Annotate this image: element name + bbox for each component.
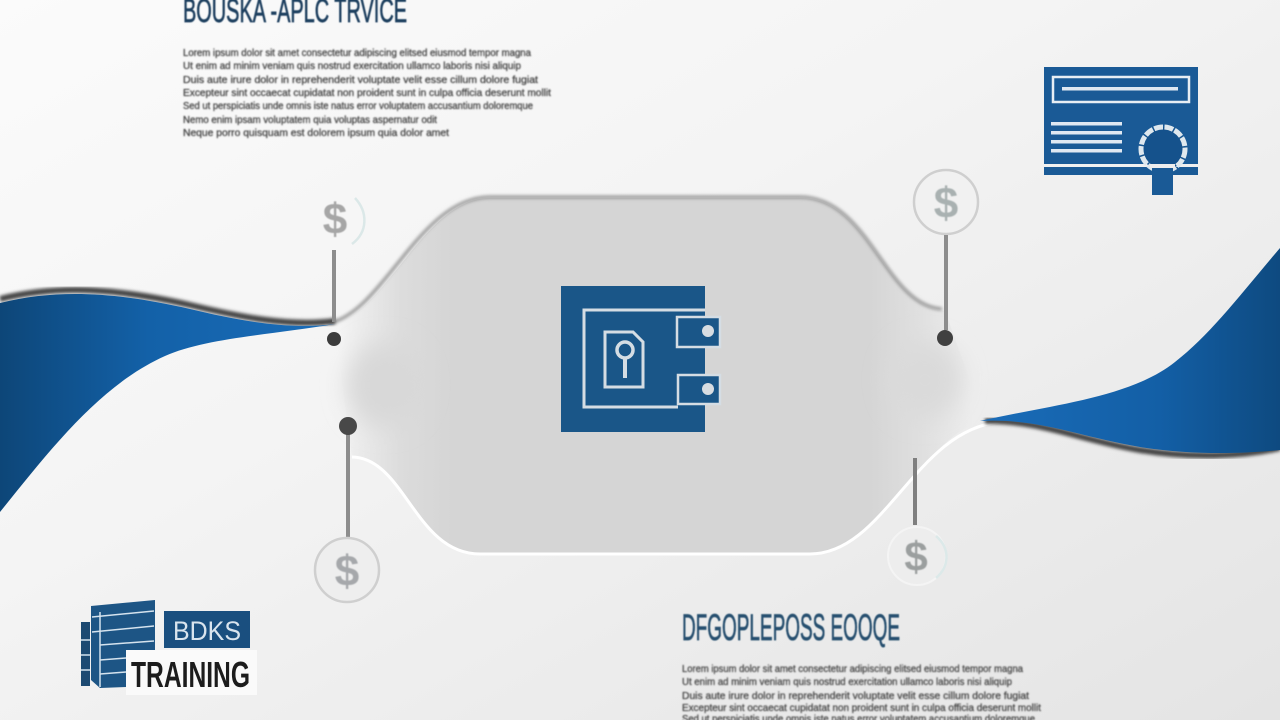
text block: bottom: Excepteur sint occaecat cupidatat non proident sunt in culpa officia deserunt mollit (682, 702, 1041, 714)
right blue wave (980, 248, 1280, 455)
pin: lower left dollar (315, 417, 379, 602)
training label (126, 650, 257, 695)
text block: top: Excepteur sint occaecat cupidatat non proident sunt in culpa officia deserunt mollit (183, 87, 551, 99)
text block: bottom: Lorem ipsum dolor sit amet consectetur adipiscing elitsed eiusmod tempor magna (682, 663, 1023, 675)
text block: top (183, 47, 551, 139)
pin: lower right dollar: $ (904, 533, 928, 580)
pin: lower right dollar (888, 458, 946, 585)
pin: lower left dollar: $ (335, 547, 359, 596)
text block: bottom: Ut enim ad minim veniam quis nostrud exercitation ullamco laboris nisi aliquip (682, 676, 1012, 688)
text block: top: Ut enim ad minim veniam quis nostrud exercitation ullamco laboris nisi aliquip (183, 60, 521, 72)
icon: certificate (1044, 67, 1198, 195)
bottom edge highlight (352, 422, 1000, 554)
icon: central safe (561, 286, 720, 432)
logo: books training: BDKS (173, 616, 241, 646)
text block: bottom: Duis aute irure dolor in reprehenderit voluptate velit esse cillum dolore fugiat (682, 690, 1029, 702)
text block: top: Neque porro quisquam est dolorem ipsum quia dolor amet (183, 127, 449, 139)
pin: upper left dollar (323, 195, 364, 346)
icon: books (81, 600, 155, 688)
text block: top: Nemo enim ipsam voluptatem quia voluptas aspernatur odit (183, 114, 437, 126)
top edge shadow (330, 197, 942, 323)
logo: books training: TRAINING (131, 654, 250, 695)
text block: top: Lorem ipsum dolor sit amet consectetur adipiscing elitsed eiusmod tempor magna (183, 47, 531, 59)
pin: upper left dollar: $ (323, 195, 347, 244)
text block: top: Duis aute irure dolor in reprehenderit voluptate velit esse cillum dolore fugiat (183, 74, 538, 86)
logo: books training (81, 600, 257, 695)
text block: top: Sed ut perspiciatis unde omnis iste natus error voluptatem accusantium doloremque (183, 100, 533, 112)
heading: bottom: DFGOPLEPOSS EOOQE (682, 607, 900, 648)
pin: upper right dollar (914, 170, 978, 346)
text block: bottom (682, 663, 1041, 720)
panel: central grey shape (330, 197, 1000, 554)
pin: upper right dollar: $ (934, 179, 958, 228)
left blue wave (0, 290, 335, 512)
badge (164, 611, 250, 648)
